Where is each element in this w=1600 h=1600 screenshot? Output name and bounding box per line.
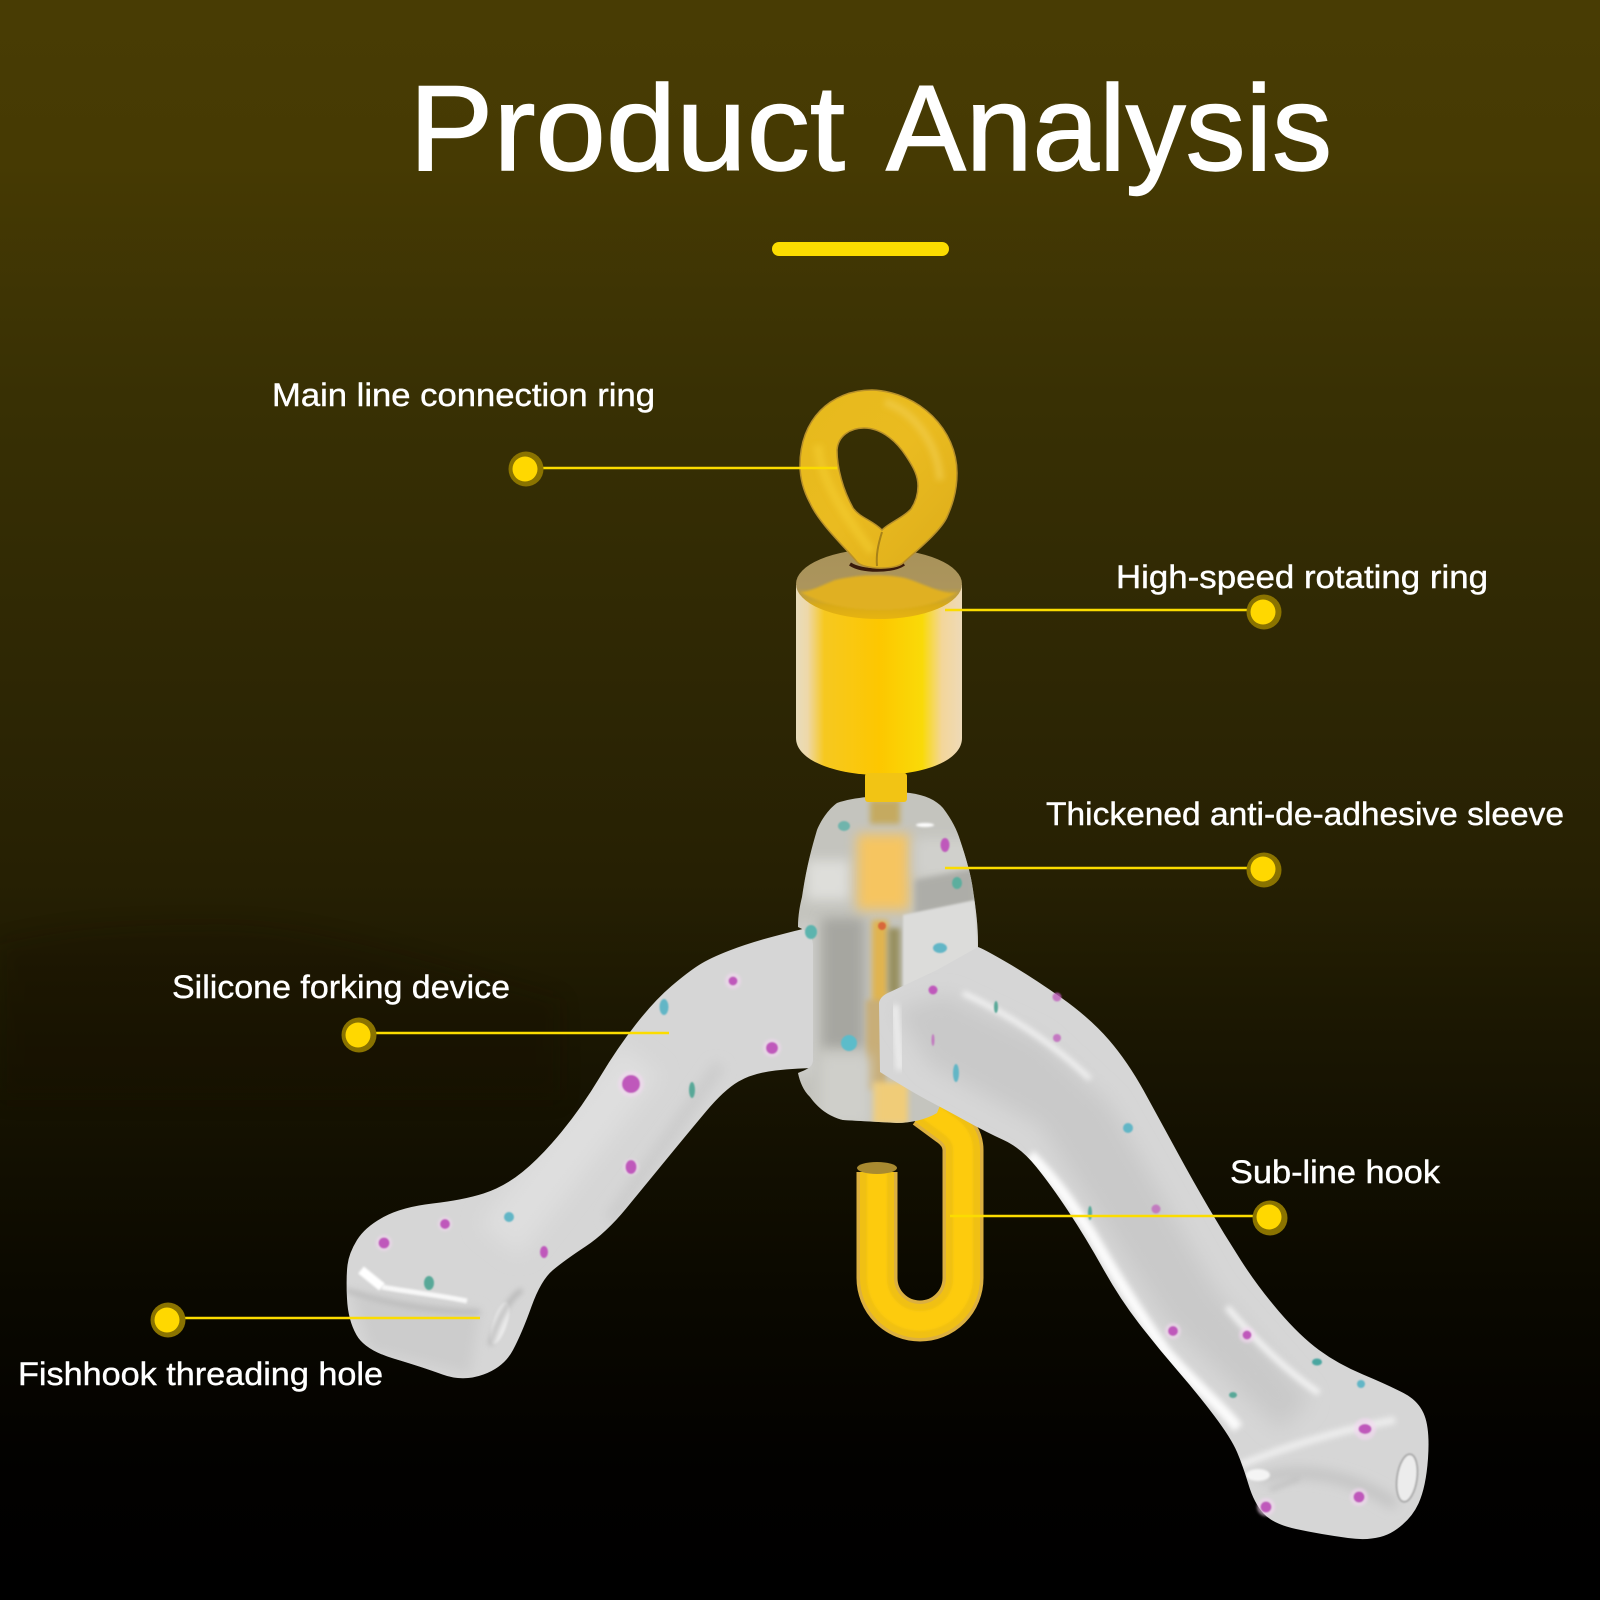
callout: high-speed rotating ring [945,559,1488,630]
leader line [950,1215,1262,1217]
marker dot [508,452,544,486]
panel: silicone right arm [860,940,1440,1550]
callout: fishhook threading hole [18,1302,480,1392]
marker dot [150,1302,186,1338]
icon: main line connection ring [800,390,957,568]
callout: silicone forking device [172,969,669,1052]
title: Product [409,60,845,196]
callout: sub-line hook [950,1154,1441,1236]
title underline [772,242,949,256]
marker dot [342,1018,376,1052]
marker dot [1246,852,1282,888]
marker dot [1246,594,1282,630]
callout: thickened sleeve [945,796,1564,888]
leader line [945,609,1263,611]
silicone colour speckles [376,821,1376,1516]
label: Main line connection ring [272,377,655,413]
label: Silicone forking device [172,969,510,1005]
icon: stem [865,773,907,802]
title [409,60,1332,196]
label: Sub-line hook [1230,1154,1441,1190]
label: Fishhook threading hole [18,1356,383,1392]
marker dot [1252,1200,1288,1236]
panel: silicone left arm [346,929,813,1378]
icon: high-speed rotating ring cylinder [796,549,962,775]
panel: sleeve [798,792,978,1123]
callout: main line connection ring [272,377,837,486]
icon: sub-line hook [857,1108,963,1321]
leader line [359,1032,669,1034]
label: High-speed rotating ring [1116,559,1488,595]
label: Thickened anti-de-adhesive sleeve [1046,796,1564,832]
leader line [168,1317,480,1319]
leader line [945,867,1263,869]
leader line [526,467,837,469]
title: Analysis [886,60,1332,196]
product illustration: swivel fork [330,390,1440,1550]
